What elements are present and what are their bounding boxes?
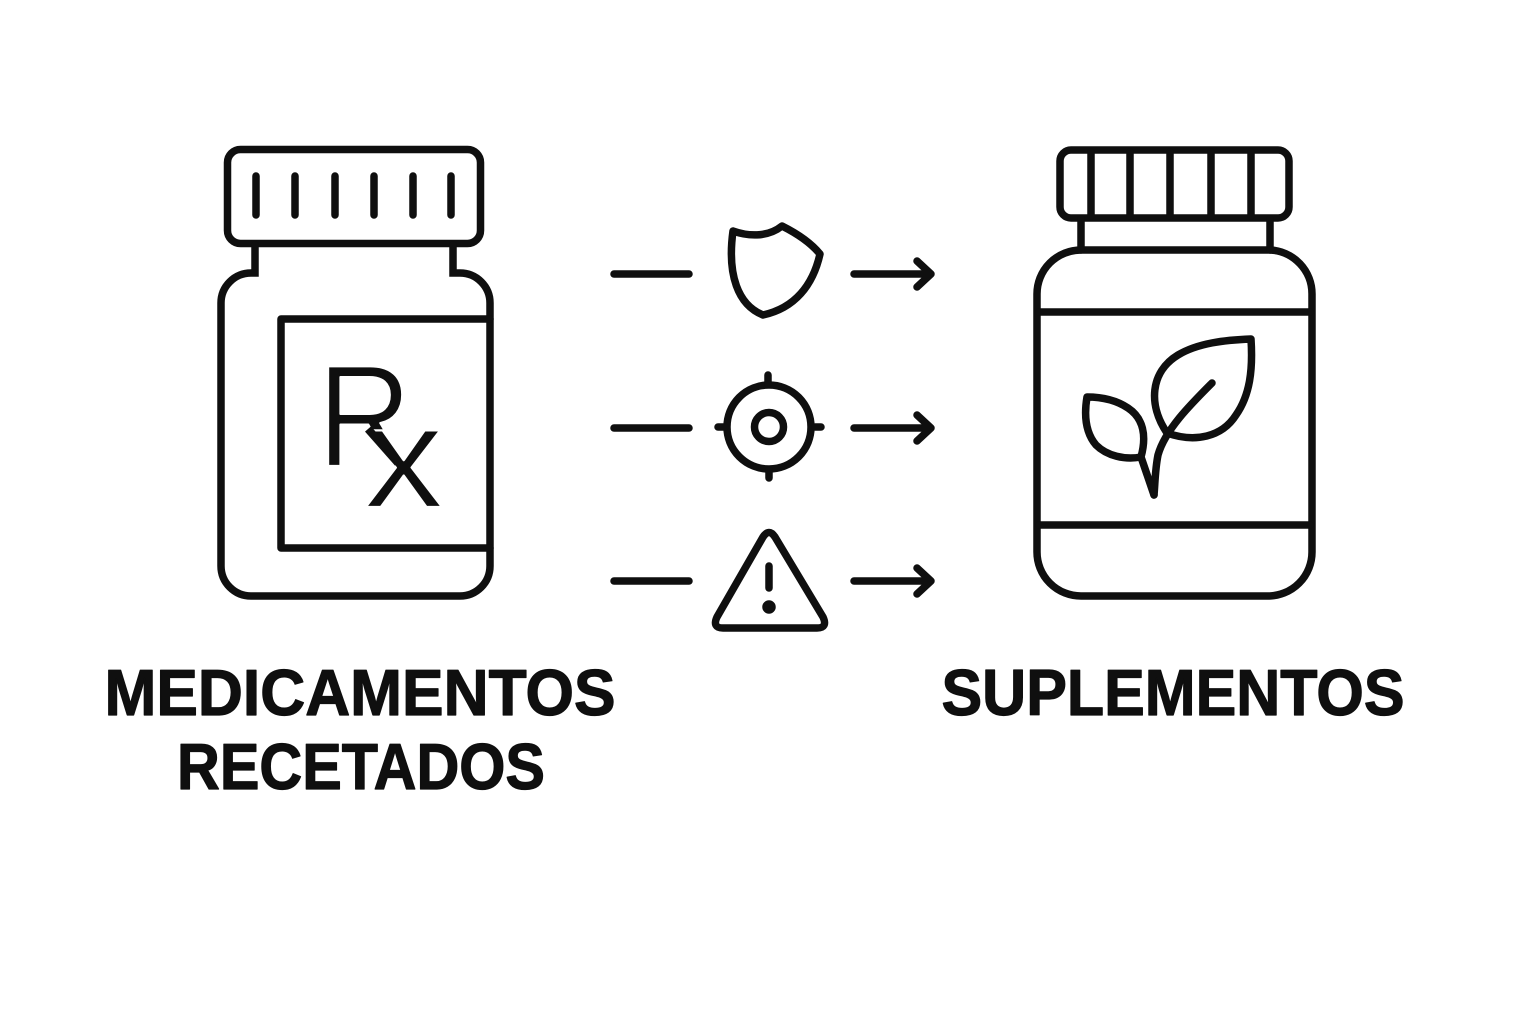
Rx symbol <box>318 336 444 538</box>
heading: medicamentos recetados: RECETADOS <box>177 730 545 803</box>
row: target arrow <box>614 375 931 478</box>
heading: medicamentos recetados: MEDICAMENTOS <box>104 656 616 729</box>
heading: suplementos: SUPLEMENTOS <box>942 656 1404 729</box>
heading: medicamentos recetados <box>104 656 616 803</box>
row: shield arrow <box>614 226 931 315</box>
row: warning arrow <box>614 532 931 628</box>
icon: supplement bottle <box>1037 150 1312 596</box>
Rx symbol: R <box>318 336 412 498</box>
leaf icon <box>1086 339 1252 495</box>
Rx symbol: x <box>364 377 444 538</box>
icon: prescription bottle <box>221 150 490 596</box>
